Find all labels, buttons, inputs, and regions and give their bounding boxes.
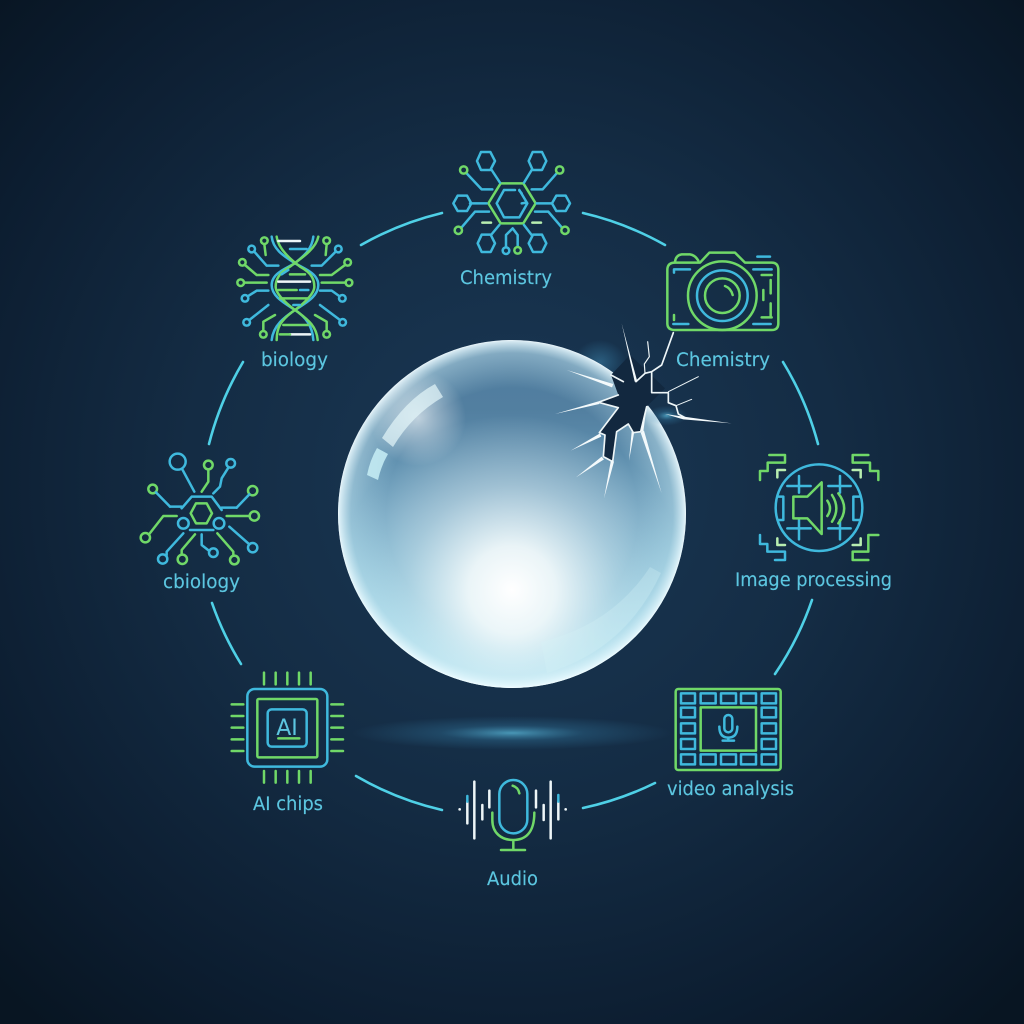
icon: AI chip: AI [276,716,298,741]
icon: film frame with microphone [676,689,781,770]
icon: DNA helix circuit [237,237,352,340]
label: Chemistry [460,268,552,289]
node: audio [458,780,567,890]
bubble highlight: small left [367,448,388,480]
bubble highlight: lower right crescent [541,567,661,673]
label: video analysis [667,779,794,800]
icon: hexagon network [141,454,259,564]
hole [598,355,665,462]
cracked hole in bubble [555,323,732,498]
node: AI chips [232,673,343,815]
node: image processing [735,455,892,591]
node: biology DNA [237,237,352,371]
label: Audio [487,869,538,890]
bubble highlight: upper left [382,384,443,447]
label: AI chips [253,794,323,815]
icon: speaker in scanning frame [760,455,878,560]
segmented ring [209,213,818,810]
label: Chemistry [676,350,770,371]
icon: camera [667,253,778,330]
node: cbiology [141,454,259,593]
label: biology [261,350,328,371]
glow behind bubble at crack [574,340,626,384]
node: top chemistry [453,152,570,289]
label: Image processing [735,570,892,591]
ground glow beneath bubble [352,716,672,750]
crack lines [598,333,698,462]
node: video analysis [667,689,794,800]
node: camera [667,253,778,371]
label: cbiology [163,572,240,593]
icon: microphone with sound waves [458,780,567,850]
crack spikes [555,323,732,498]
icon: AI chip [232,673,343,783]
icon: molecule network [453,152,570,254]
bubble [338,340,686,688]
